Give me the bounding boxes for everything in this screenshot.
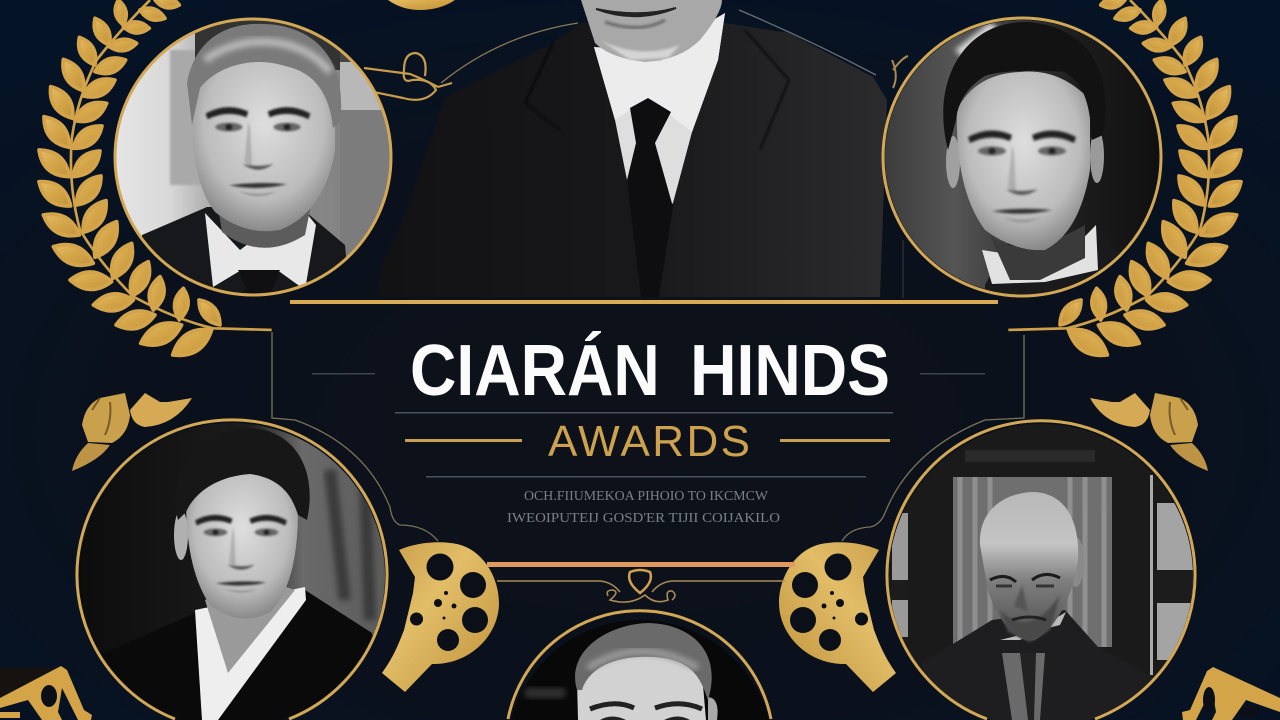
top gold ornament bbox=[388, 0, 455, 10]
portrait: bottom left bbox=[76, 420, 391, 720]
right bottom film clapper bbox=[1182, 667, 1280, 720]
left film reel bbox=[382, 542, 499, 692]
portrait: top right bbox=[883, 17, 1164, 299]
ornament between reels bbox=[497, 570, 785, 602]
title side rules bbox=[312, 373, 985, 374]
left top ornament bbox=[72, 393, 192, 471]
small description text bbox=[507, 489, 780, 526]
small description text: OCH.FIIUMEKOA PIHOIO TO IKCMCW bbox=[524, 489, 769, 504]
right top ornament bbox=[1090, 393, 1208, 471]
left bottom film clapper bbox=[0, 666, 92, 720]
copper rule between reels bbox=[487, 562, 795, 567]
scroll ornament right of center portrait bbox=[892, 56, 908, 88]
portrait: bottom right bbox=[887, 421, 1199, 720]
scroll ornament left of center portrait bbox=[364, 53, 452, 100]
right film reel bbox=[779, 542, 896, 692]
subtitle side rules bbox=[405, 439, 890, 442]
portrait: top left bbox=[114, 17, 395, 300]
frame connector lines bbox=[272, 10, 1024, 541]
upper divider bbox=[395, 412, 893, 414]
subtitle: awards: AWARDS bbox=[548, 417, 750, 466]
gold rule under center portrait bbox=[290, 300, 998, 304]
small description text: IWEOIPUTEIJ GOSD'ER TIJII COIJAKILO bbox=[507, 511, 780, 526]
center portrait: man in suit bbox=[378, 0, 887, 297]
right laurel bbox=[1008, 0, 1241, 355]
lower divider bbox=[426, 476, 866, 478]
title: CIARÁN HINDS bbox=[410, 331, 890, 411]
portrait: bottom center bbox=[505, 611, 775, 720]
left laurel bbox=[39, 0, 272, 355]
